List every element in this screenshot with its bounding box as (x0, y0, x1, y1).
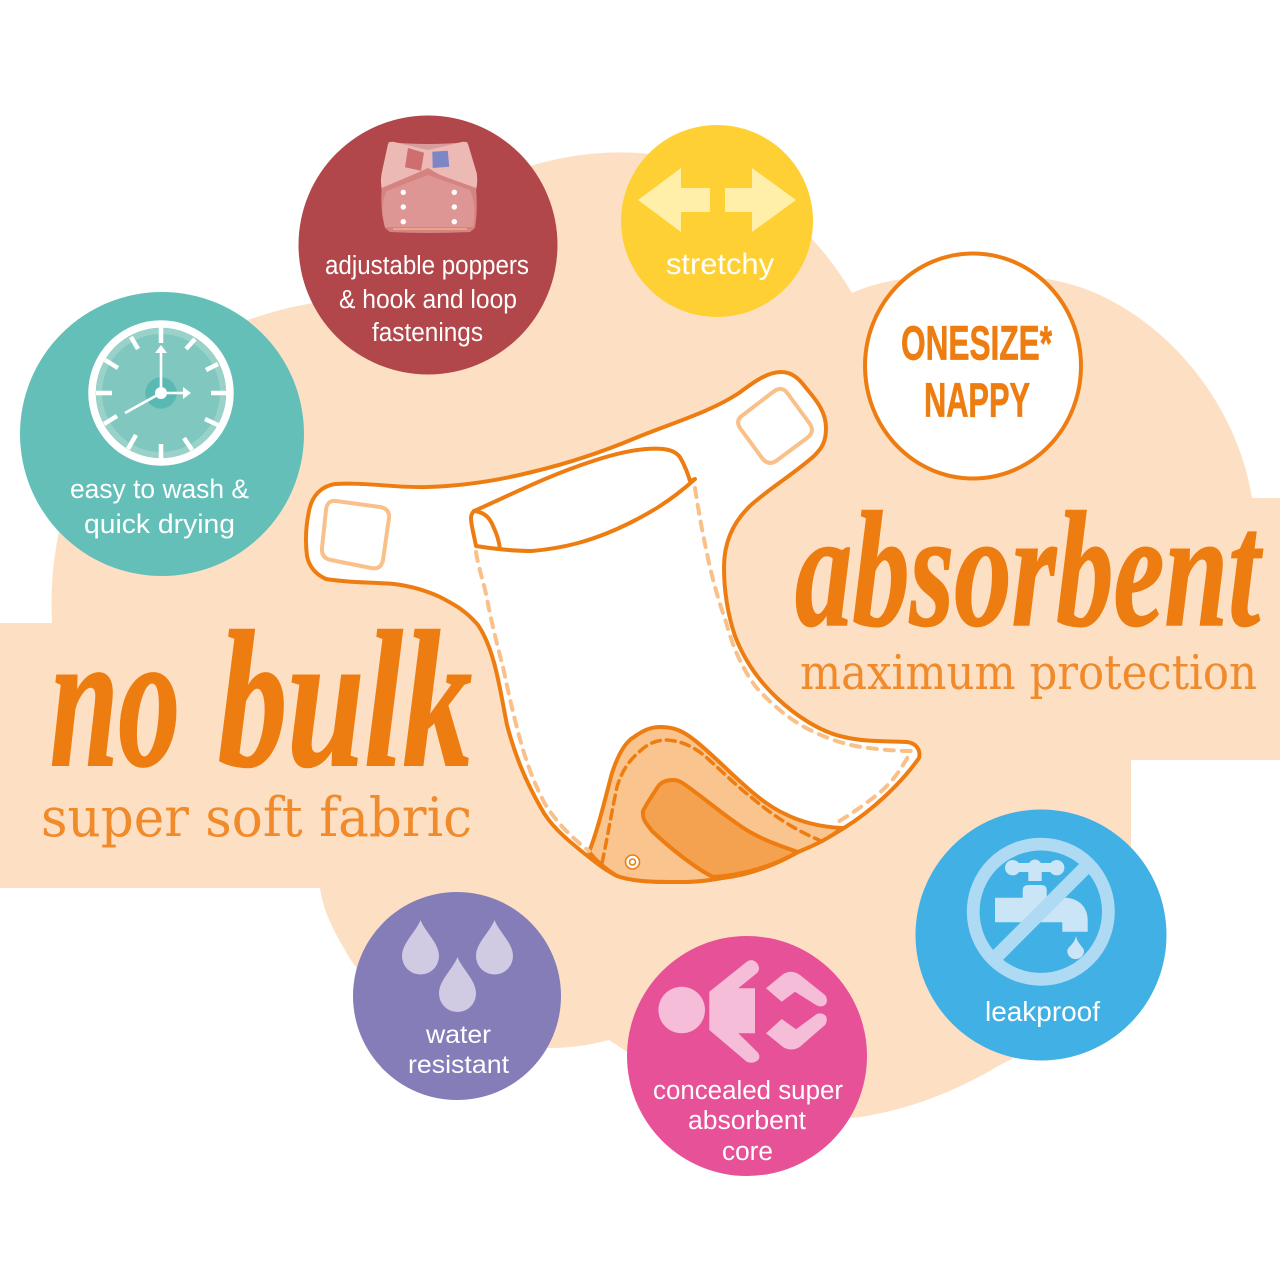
icon: crossed tap (973, 844, 1108, 979)
label: concealed super (653, 1077, 844, 1105)
badge: concealed core (627, 936, 867, 1176)
left tab square (322, 501, 389, 568)
absorbent core (643, 780, 798, 877)
label: core (722, 1138, 773, 1166)
label (408, 1021, 509, 1079)
icon: stretch arrows (638, 168, 796, 232)
label (325, 252, 529, 347)
badge: water resistant (353, 892, 561, 1100)
nappy illustration (306, 372, 919, 882)
heading: no bulk (50, 592, 472, 808)
heading: no bulk: bulk (218, 592, 472, 808)
nappy outer shape (306, 372, 919, 882)
badge: stretchy (621, 125, 813, 317)
popper (626, 855, 640, 869)
label (70, 474, 249, 539)
badge: onesize nappy (865, 254, 1081, 478)
badge: onesize nappy: NAPPY (924, 374, 1030, 428)
label: easy to wash & (70, 474, 249, 504)
front waist flap (471, 449, 695, 551)
heading: no bulk: no (50, 592, 180, 808)
badge: adjustable poppers (298, 116, 558, 374)
label (653, 1077, 844, 1166)
label: resistant (408, 1051, 509, 1079)
crotch panel (589, 727, 842, 882)
right side stitching (695, 488, 911, 825)
badge: leakproof (916, 810, 1166, 1060)
badge: easy to wash and quick drying (20, 292, 304, 576)
flap fold (474, 511, 500, 549)
left side stitching (476, 552, 589, 851)
label: fastenings (372, 319, 483, 347)
background peach blob (0, 152, 1280, 1118)
icon: water drops (402, 920, 513, 1012)
label: stretchy (666, 248, 774, 281)
subheading: super soft fabric: super soft fabric (41, 786, 472, 849)
inner crotch stitching (602, 740, 819, 863)
label: & hook and loop (339, 286, 517, 314)
right tab square (738, 389, 812, 463)
icon: clock (92, 324, 230, 462)
icon: baby figure (658, 960, 827, 1063)
label: adjustable poppers (325, 252, 529, 280)
label: absorbent (688, 1107, 806, 1135)
label: quick drying (84, 509, 235, 539)
label: water (425, 1021, 491, 1049)
label: leakproof (985, 996, 1100, 1027)
badge: onesize nappy: ONESIZE* (901, 318, 1052, 370)
icon: folded nappy (381, 142, 477, 233)
